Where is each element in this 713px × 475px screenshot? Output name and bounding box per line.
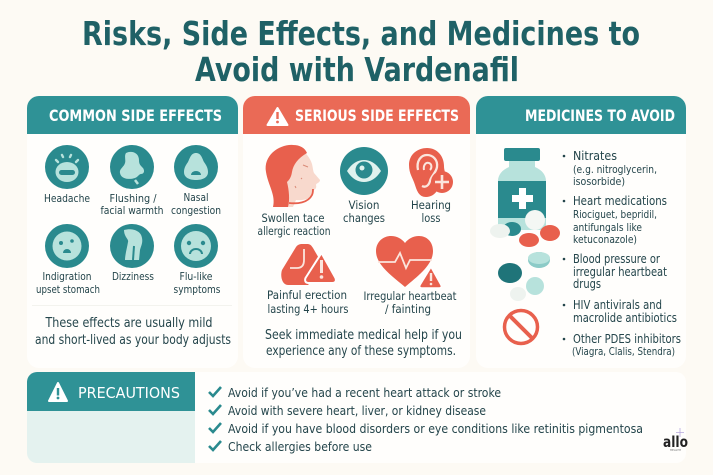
icon: indigestion xyxy=(45,224,89,268)
logo: allo health: HEALTH xyxy=(670,448,681,452)
label: swollen face xyxy=(258,211,330,238)
label: headache: Headache xyxy=(44,192,90,205)
title: Avoid with Vardenafil xyxy=(195,50,519,89)
icon: flu-like xyxy=(174,224,218,268)
panel: serious side effects xyxy=(243,96,470,368)
label: swollen face: Swollen tace xyxy=(262,211,324,225)
header: medicines to avoid: MEDICINES TO AVOID xyxy=(525,106,675,125)
label: nasal congestion xyxy=(171,191,221,217)
label: swollen face: allergic reaction xyxy=(258,224,330,238)
label: flushing: facial warmth xyxy=(100,204,164,217)
list: medicines: Heart medications xyxy=(573,193,667,208)
label: painful erection: lasting 4+ hours xyxy=(268,302,349,316)
list: precautions xyxy=(209,385,643,454)
list: medicines: Riociguet, bepridil, xyxy=(573,209,657,221)
list: precautions: Avoid if you have blood disorders or eye conditions like retinitis pigmentosa xyxy=(228,421,643,436)
label: vision xyxy=(343,198,385,225)
note: seek help: experience any of these symptoms. xyxy=(266,343,456,359)
list: medicines: Other PDES inhibitors xyxy=(573,332,681,346)
panel: precautions xyxy=(27,372,686,463)
label: irregular heartbeat: / fainting xyxy=(385,302,431,316)
icon: nasal congestion xyxy=(174,145,218,189)
list: precautions: Avoid with severe heart, liver, or kidney disease xyxy=(228,403,486,418)
list: medicines: Blood pressure or xyxy=(573,252,660,266)
note: seek help xyxy=(265,327,462,359)
list: medicines: Nitrates xyxy=(573,148,617,163)
label: hearing: Hearing xyxy=(411,198,451,212)
icon: ear xyxy=(409,148,453,197)
list: medicines: antifungals like xyxy=(573,222,642,234)
label: dizziness: Dizziness xyxy=(112,270,154,283)
list: medicines: isosorbide) xyxy=(573,176,625,188)
icon: warning xyxy=(268,108,288,125)
note: common effects xyxy=(35,315,231,348)
list: medicines: irregular heartbeat xyxy=(573,265,667,279)
panel: medicines to avoid xyxy=(476,96,686,368)
icon: headache xyxy=(45,145,89,189)
icon: painful erection warning xyxy=(281,244,336,285)
label: indigestion xyxy=(36,270,100,296)
icon: prohibited xyxy=(504,310,538,344)
label: vision: changes xyxy=(343,211,385,225)
label: nasal congestion: Nasal xyxy=(184,191,208,204)
icon: medicine bottle and pills xyxy=(490,148,560,301)
label: hearing xyxy=(411,198,451,225)
label: painful erection: Painful erection xyxy=(267,288,347,302)
icon: warning xyxy=(49,383,67,401)
label: irregular heartbeat: Irregular heartbeat xyxy=(364,289,457,303)
panel: common side effects xyxy=(27,96,238,368)
list: medicines: (e.g. nitroglycerin, xyxy=(573,164,657,176)
icon: eye xyxy=(340,147,388,195)
label: indigestion: Indigration xyxy=(42,270,92,283)
label: flushing xyxy=(100,192,164,217)
header: precautions xyxy=(27,372,195,411)
label: irregular heartbeat xyxy=(364,289,457,316)
label: painful erection xyxy=(267,288,349,316)
logo: allo health xyxy=(663,428,688,452)
icon: swollen face xyxy=(266,145,320,207)
label: indigestion: upset stomach xyxy=(36,283,100,296)
label: vision: Vision xyxy=(348,198,380,212)
list: precautions: Avoid if you’ve had a recent heart attack or stroke xyxy=(228,385,501,400)
header: common side effects xyxy=(27,96,238,134)
label: flu-like: Flu-like xyxy=(180,270,213,283)
list: medicines: ketuconazole) xyxy=(573,234,637,246)
header: medicines to avoid xyxy=(476,96,686,134)
title xyxy=(82,14,640,89)
list: medicines: drugs xyxy=(573,277,601,291)
list: medicines: (Viagra, Clalis, Stendra) xyxy=(572,346,675,358)
label: nasal congestion: congestion xyxy=(171,204,221,217)
note: common effects: These effects are usually mild xyxy=(45,315,213,331)
icon: irregular heartbeat xyxy=(376,236,441,288)
list: precautions: Check allergies before use xyxy=(228,439,372,454)
label: flushing: Flushing / xyxy=(110,192,157,205)
list: medicines xyxy=(563,148,681,358)
icon: dizziness xyxy=(110,224,154,268)
note: seek help: Seek immediate medical help if you xyxy=(265,327,462,343)
logo: allo health: allo xyxy=(663,433,688,451)
header: serious side effects xyxy=(243,96,470,134)
header: serious side effects: SERIOUS SIDE EFFECTS xyxy=(295,106,459,125)
label: hearing: loss xyxy=(422,211,441,225)
list: medicines: macrolide antibiotics xyxy=(573,311,677,325)
label: flu-like xyxy=(174,270,221,296)
icon: flushing xyxy=(110,145,154,189)
header: common side effects: COMMON SIDE EFFECTS xyxy=(49,106,222,125)
label: flu-like: symptoms xyxy=(174,283,221,296)
list: medicines: HIV antivirals and xyxy=(573,298,662,312)
header: precautions: PRECAUTIONS xyxy=(78,384,180,402)
note: common effects: and short-lived as your body adjusts xyxy=(35,332,231,348)
